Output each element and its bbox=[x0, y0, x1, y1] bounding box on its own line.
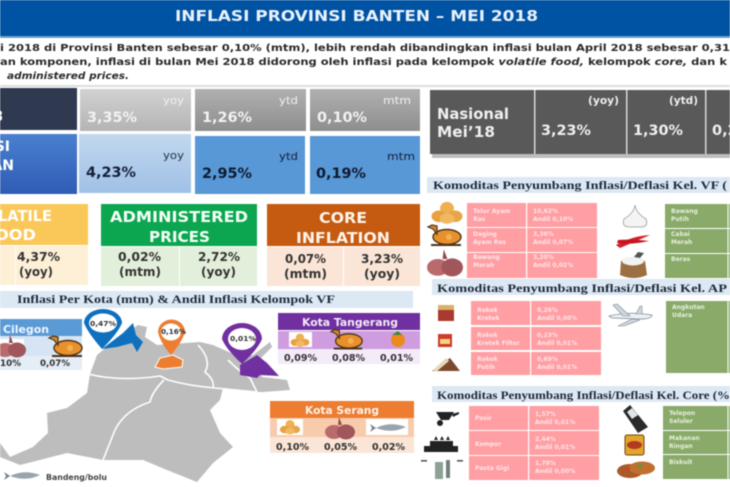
panel: Kota Tangerang: 0,09% bbox=[284, 353, 317, 364]
table: inflation: 3,36% bbox=[533, 231, 554, 238]
icon: egg bbox=[291, 334, 309, 347]
panel: core inflation: CORE bbox=[319, 209, 367, 227]
icon: shallot bbox=[0, 335, 26, 358]
table: inflation: Andil 0,00% bbox=[535, 468, 575, 475]
panel: Kota Tangerang: 0,08% bbox=[332, 353, 365, 364]
table: deflation: Ringan bbox=[669, 443, 693, 450]
card: yoy bbox=[80, 89, 191, 131]
icon: chili bbox=[616, 235, 650, 248]
panel: Cilegon: 10% bbox=[0, 359, 21, 369]
panel: komoditas Core: Komoditas Penyumbang Inflasi/Deflasi Kel. Core (% bbox=[437, 390, 730, 402]
table: inflation: 1,57% bbox=[535, 411, 556, 418]
table: deflation bbox=[663, 406, 730, 479]
panel: Nasional Mei 18: Nasional bbox=[437, 105, 509, 123]
panel: volatile food: 4,37% bbox=[17, 250, 60, 264]
panel: core inflation bbox=[267, 204, 420, 286]
panel: Kota Serang bbox=[270, 401, 414, 453]
panel: core inflation: 0,07% bbox=[285, 252, 326, 266]
table: inflation: 0,69% bbox=[537, 356, 558, 363]
panel: administered prices bbox=[101, 204, 257, 286]
icon: egg bbox=[431, 202, 463, 224]
table: inflation: Ayam Ras bbox=[473, 239, 506, 246]
icon: chicken bbox=[331, 330, 362, 349]
icon: shallot bbox=[325, 417, 355, 440]
intro paragraph: i 2018 di Provinsi Banten sebesar 0,10% (mtm), lebih rendah dibandingkan inflasi bulan April 2018 sebesar 0,31 bbox=[0, 43, 730, 54]
card: ytd: 2,95% bbox=[202, 166, 252, 182]
table: inflation: Ras bbox=[473, 216, 486, 223]
icon: toothpaste bbox=[421, 460, 463, 479]
intro paragraph: an komponen, inflasi di bulan Mei 2018 didorong oleh inflasi pada kelompok volatile food, kelompok core, dan k bbox=[0, 57, 728, 68]
table: deflation: Angkutan bbox=[672, 304, 705, 311]
table: deflation: Udara bbox=[672, 312, 692, 319]
region: Cilegon bbox=[102, 323, 143, 352]
card: ytd: 1,26% bbox=[202, 110, 252, 126]
title: INFLASI PROVINSI BANTEN – MEI 2018 bbox=[175, 7, 538, 25]
pin: Serang 0,16%: 0,16% bbox=[161, 327, 186, 336]
panel: administered prices: PRICES bbox=[149, 228, 210, 246]
panel: core inflation: 3,23% bbox=[361, 252, 403, 266]
intro paragraph: administered prices. bbox=[7, 71, 129, 82]
card: mtm: mtm bbox=[383, 94, 411, 107]
table: inflation: 10,62% bbox=[533, 208, 558, 215]
table: inflation: Rokok bbox=[477, 356, 499, 363]
table: inflation: Pasta Gigi bbox=[475, 465, 509, 472]
card: mtm bbox=[310, 136, 420, 194]
panel: komoditas VF: Komoditas Penyumbang Inflasi/Deflasi Kel. VF ( bbox=[433, 180, 727, 192]
table: deflation: Telepon bbox=[669, 410, 695, 417]
panel: Nasional Mei 18: (ytd) bbox=[669, 95, 698, 107]
panel: Cilegon: 0,07% bbox=[40, 359, 70, 369]
pin: Cilegon 0,47% bbox=[84, 309, 122, 349]
panel: Kota Serang: 0,02% bbox=[372, 442, 405, 453]
table: deflation bbox=[666, 301, 730, 373]
panel: administered prices: 0,02% bbox=[118, 250, 161, 264]
table: inflation: Kretek Filter bbox=[477, 340, 520, 347]
icon: cigarette pack bbox=[438, 334, 452, 347]
table: inflation bbox=[471, 301, 601, 375]
table: inflation: Andil 0,00% bbox=[537, 315, 577, 322]
icon: stove bbox=[424, 436, 458, 452]
card: yoy: yoy bbox=[163, 149, 185, 162]
panel: komoditas AP bbox=[432, 279, 730, 375]
table: inflation: 1,70% bbox=[535, 460, 556, 467]
table: deflation: Beras bbox=[671, 256, 691, 263]
table: deflation: Merah bbox=[671, 239, 692, 246]
panel: administered prices: 2,72% bbox=[198, 250, 240, 264]
icon: orange bbox=[391, 331, 405, 347]
pin: Serang 0,16% bbox=[158, 320, 186, 355]
card: ytd: ytd bbox=[279, 150, 298, 163]
map of Banten bbox=[0, 309, 290, 482]
table: inflation: Pasir bbox=[475, 415, 492, 422]
region: Serang bbox=[155, 355, 183, 369]
card: mtm bbox=[310, 89, 420, 131]
panel: Kota Serang: 0,05% bbox=[324, 442, 357, 453]
table: inflation: Andil 0,01% bbox=[535, 419, 575, 426]
icon: egg bbox=[280, 420, 300, 434]
table: deflation: Seluler bbox=[669, 418, 693, 425]
table: inflation: Merah bbox=[473, 262, 494, 269]
pin: Cilegon 0,47%: 0,47% bbox=[90, 319, 116, 328]
card: ytd bbox=[195, 89, 306, 131]
panel: Kota Tangerang: Kota Tangerang bbox=[302, 317, 398, 329]
panel: administered prices: ADMINISTERED bbox=[110, 208, 248, 226]
panel: volatile food: (yoy) bbox=[19, 265, 53, 279]
table: inflation: Bawang bbox=[473, 254, 500, 261]
table: inflation: Andil 0,01% bbox=[537, 340, 577, 347]
intro paragraph bbox=[0, 43, 730, 82]
panel: administered prices: (yoy) bbox=[201, 265, 236, 279]
panel: Kota Serang: Kota Serang bbox=[305, 405, 379, 417]
icon: fish bbox=[370, 424, 406, 432]
map heading: Inflasi Per Kota (mtm) & Andil Inflasi Kelompok VF bbox=[17, 294, 335, 306]
panel: Kota Tangerang bbox=[278, 313, 420, 364]
panel: Cilegon bbox=[0, 319, 82, 370]
panel: Nasional Mei 18: (yoy) bbox=[588, 95, 619, 107]
card: ytd: ytd bbox=[279, 94, 298, 107]
panel: volatile food bbox=[0, 204, 88, 285]
pin: Tangerang 0,01% bbox=[222, 323, 262, 364]
icon: rice sack bbox=[620, 252, 647, 278]
icon: chicken bbox=[428, 225, 461, 245]
icon: cigarette box bbox=[438, 305, 454, 321]
panel: Nasional Mei 18: 3,23% bbox=[541, 123, 591, 139]
icon: snack pack bbox=[625, 435, 644, 455]
panel: core inflation: (mtm) bbox=[284, 267, 327, 281]
pin: Tangerang 0,01%: 0,01% bbox=[230, 334, 256, 343]
table: inflation: Putih bbox=[477, 364, 495, 371]
icon: mobile phone bbox=[623, 405, 648, 433]
panel: komoditas AP: Komoditas Penyumbang Inflasi/Deflasi Kel. AP bbox=[437, 283, 727, 295]
panel: Banten inflation row bbox=[0, 88, 420, 131]
table: inflation: 0,26% bbox=[537, 307, 558, 314]
legend: bandeng: Bandeng/bolu bbox=[46, 473, 107, 482]
table: inflation: Rokok bbox=[477, 332, 499, 339]
panel: Kota Tangerang: 0,01% bbox=[380, 353, 413, 364]
table: inflation: Kompor bbox=[475, 441, 501, 448]
card: yoy: yoy bbox=[163, 94, 185, 107]
panel: Banten komponen row bbox=[0, 134, 420, 194]
card: mtm: 0,19% bbox=[316, 166, 366, 182]
card: yoy: 4,23% bbox=[86, 165, 136, 181]
panel: Nasional Mei 18 bbox=[430, 90, 730, 158]
card: mtm: 0,10% bbox=[317, 110, 367, 126]
panel: komoditas VF bbox=[427, 177, 730, 278]
legend: bandeng bbox=[4, 472, 107, 482]
table: deflation: Cabai bbox=[671, 231, 690, 238]
header banner bbox=[0, 0, 730, 38]
table: inflation: Andil 0,01% bbox=[535, 444, 575, 451]
table: inflation: Kretek bbox=[477, 315, 501, 322]
panel: Nasional Mei 18: Mei’18 bbox=[437, 123, 495, 141]
card: ytd bbox=[195, 136, 305, 194]
table: inflation: Rokok bbox=[477, 307, 499, 314]
panel: core inflation: (yoy) bbox=[364, 267, 400, 281]
table: deflation: Putih bbox=[671, 216, 689, 223]
panel: komoditas Core bbox=[421, 386, 730, 480]
table: inflation: Andil 0,10% bbox=[533, 216, 573, 223]
icon: biscuit bbox=[617, 462, 655, 478]
table: inflation bbox=[467, 203, 597, 278]
table: inflation: Andil 0,01% bbox=[537, 364, 577, 371]
table: deflation: Makanan bbox=[669, 435, 700, 442]
table: deflation: Biskuit bbox=[669, 459, 693, 466]
panel: Cilegon: Cilegon bbox=[3, 323, 49, 336]
panel: administered prices: (mtm) bbox=[119, 265, 161, 279]
card: mtm: mtm bbox=[387, 150, 415, 163]
table: inflation: Telur Ayam bbox=[473, 208, 510, 215]
region: Tangerang bbox=[240, 355, 279, 378]
card: yoy: 3,35% bbox=[87, 110, 137, 126]
icon: shallot bbox=[427, 249, 463, 276]
icon: chicken bbox=[49, 336, 82, 356]
table: inflation: Andil 0,07% bbox=[533, 239, 573, 246]
table: inflation: Andil 0,02% bbox=[533, 262, 573, 269]
table: inflation: Daging bbox=[473, 231, 497, 238]
icon: airplane bbox=[609, 304, 652, 326]
icon: tobacco bbox=[432, 358, 460, 372]
icon: garlic bbox=[623, 205, 647, 227]
table: inflation: 2,44% bbox=[535, 436, 556, 443]
table: inflation bbox=[469, 406, 599, 480]
table: deflation: Bawang bbox=[671, 208, 698, 215]
panel: Nasional Mei 18: 1,30% bbox=[633, 123, 683, 139]
panel: Kota Serang: 0,10% bbox=[276, 442, 309, 453]
panel: core inflation: INFLATION bbox=[296, 229, 390, 247]
table: deflation bbox=[665, 204, 730, 278]
icon: wheelbarrow bbox=[436, 412, 459, 426]
card: yoy bbox=[79, 134, 191, 193]
table: inflation: 3,20% bbox=[533, 254, 554, 261]
table: inflation: 0,23% bbox=[537, 332, 558, 339]
map heading bbox=[0, 291, 413, 308]
